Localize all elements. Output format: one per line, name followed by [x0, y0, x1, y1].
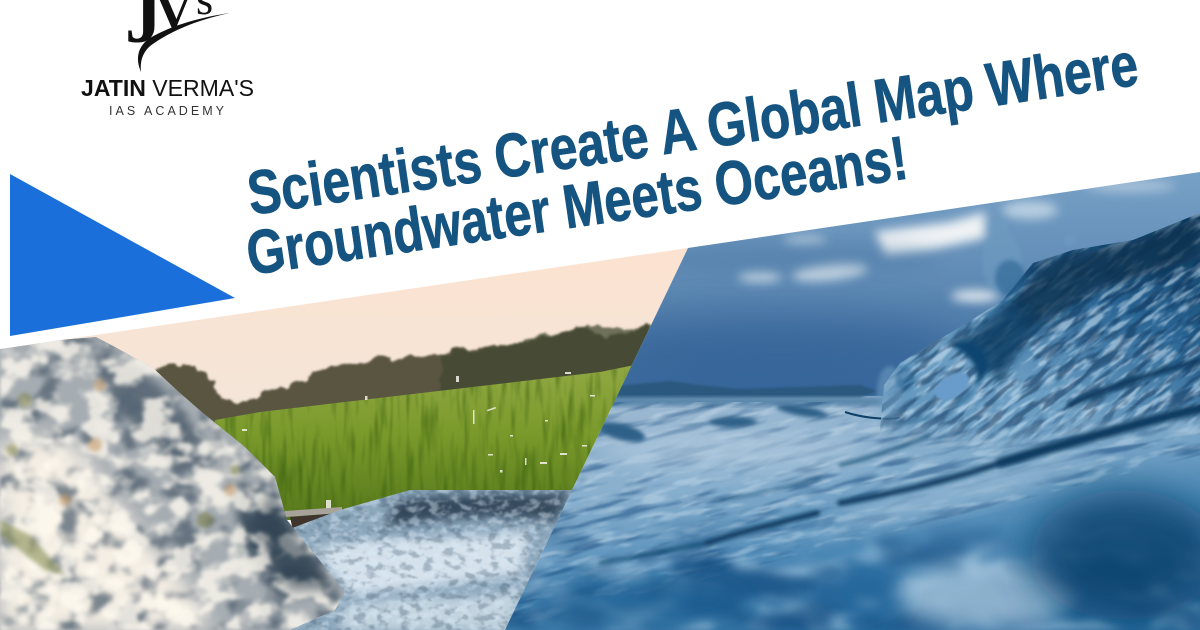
wave barrel opening	[934, 372, 970, 400]
spray	[876, 264, 995, 419]
sea surface	[500, 396, 1200, 630]
title	[242, 30, 1143, 289]
foreground pool of water	[290, 490, 572, 630]
logo name: JATIN VERMA'S	[81, 75, 254, 101]
pale foreground patches	[895, 561, 1075, 629]
wave body	[880, 213, 1200, 451]
photo: ocean wave	[505, 172, 1200, 630]
grass texture	[215, 368, 629, 510]
blurred foreground blotches	[505, 520, 1200, 630]
water mound	[0, 330, 350, 630]
blue triangle	[10, 174, 235, 336]
distant shoreline	[615, 381, 878, 399]
clouds	[738, 180, 1175, 302]
sky	[0, 248, 688, 404]
tree line	[150, 326, 660, 430]
dark wave streaks	[600, 360, 1200, 563]
logo monogram	[125, 0, 230, 72]
small grass patch at left	[0, 535, 40, 555]
photo: irrigation water and rice field	[0, 240, 700, 630]
title line 2: Groundwater Meets Oceans!	[242, 124, 912, 289]
logo: Jatin Verma's IAS Academy	[81, 0, 254, 118]
water droplets	[242, 372, 602, 509]
logo subtitle: IAS ACADEMY	[109, 104, 225, 118]
sea ripples	[509, 402, 1200, 622]
pale water glow	[605, 428, 865, 472]
bottom left water	[0, 580, 240, 630]
dark cloud mass	[628, 306, 942, 376]
irrigation pipes	[0, 545, 70, 592]
haze above water	[600, 397, 900, 406]
rice field	[200, 362, 650, 520]
dark foreground patches	[1030, 490, 1200, 620]
small waves	[597, 402, 828, 446]
stormy sky	[612, 172, 1200, 405]
